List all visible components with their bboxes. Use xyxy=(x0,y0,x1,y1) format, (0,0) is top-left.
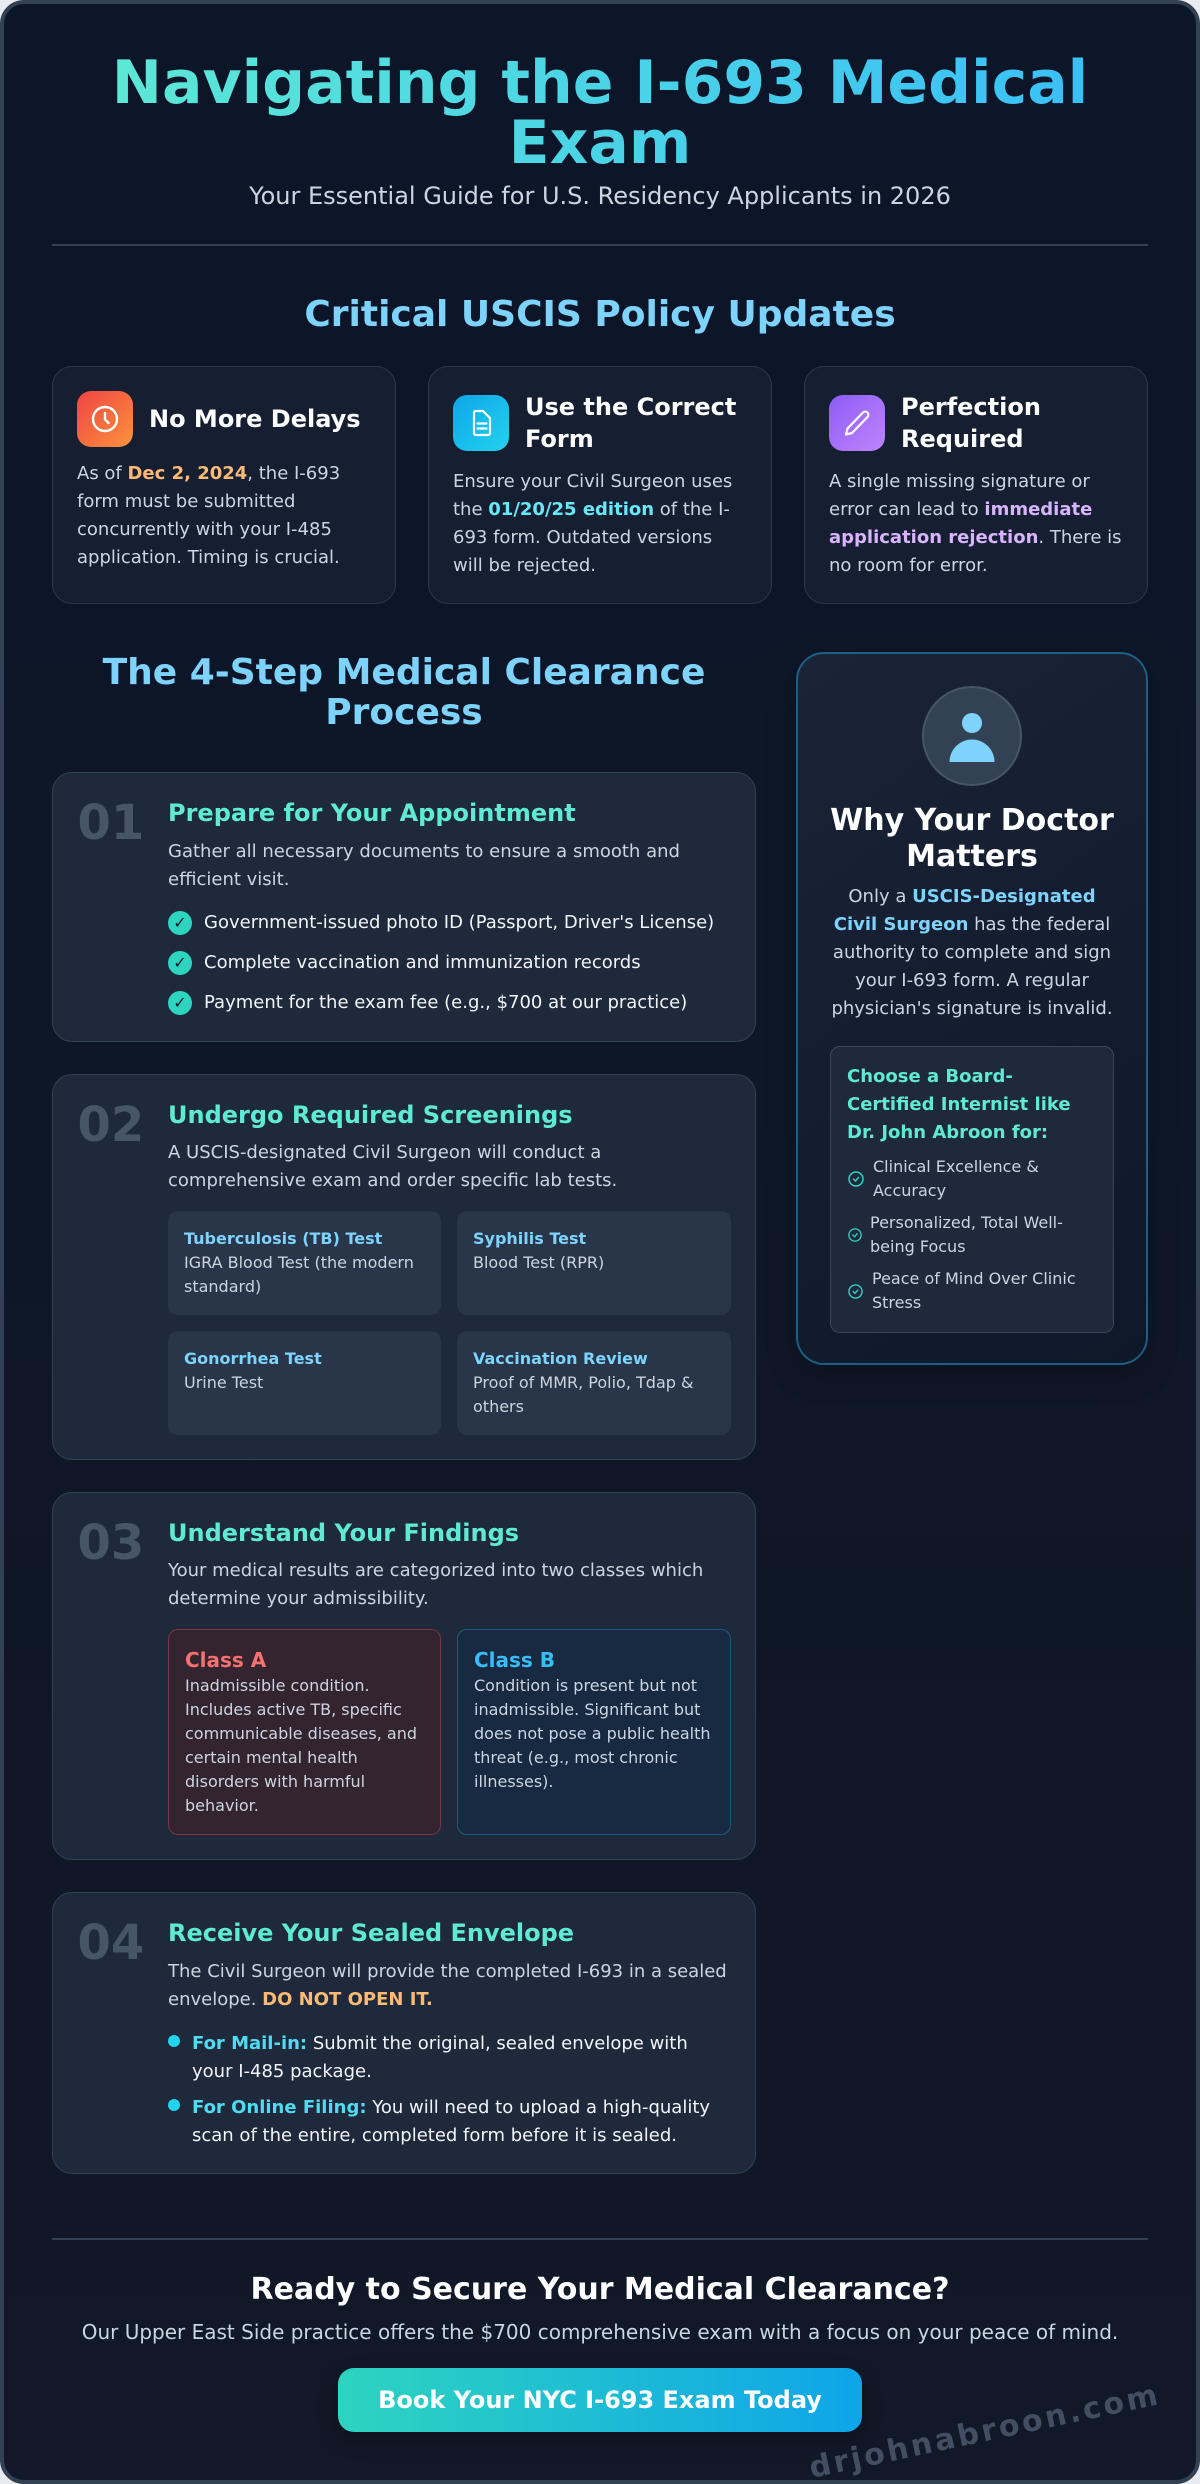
box heading: Choose a Board-Certified Internist like Dr. John Abroon for: xyxy=(847,1066,1071,1143)
step 2 content xyxy=(168,1101,731,1435)
step 3 content xyxy=(168,1519,731,1835)
test: syphilis: Blood Test (RPR) xyxy=(473,1253,604,1272)
test: syphilis: Syphilis Test xyxy=(473,1229,586,1248)
test: vaccination: Proof of MMR, Polio, Tdap & others xyxy=(473,1373,693,1416)
button: book exam: Book Your NYC I-693 Exam Today xyxy=(378,2386,822,2414)
title: Navigating the I-693 Medical Exam xyxy=(112,48,1088,178)
heading: policy updates: Critical USCIS Policy Updates xyxy=(304,294,896,335)
benefit item: Personalized, Total Well-being Focus xyxy=(870,1213,1063,1256)
icon: clock xyxy=(77,391,133,447)
panel: why your doctor matters xyxy=(796,652,1148,1365)
subtitle: Your Essential Guide for U.S. Residency Applicants in 2026 xyxy=(249,182,951,210)
panel: correct form xyxy=(428,366,772,604)
class A xyxy=(168,1629,441,1835)
test: vaccination: Vaccination Review xyxy=(473,1349,648,1368)
board-certified box xyxy=(830,1046,1114,1333)
test: gonorrhea: Gonorrhea Test xyxy=(184,1349,322,1368)
button: book exam xyxy=(338,2368,862,2432)
step 4 content: Receive Your Sealed Envelope xyxy=(168,1919,574,1947)
test: syphilis xyxy=(457,1211,731,1315)
test: gonorrhea xyxy=(168,1331,441,1435)
icon: doctor avatar xyxy=(922,686,1022,786)
panel: no more delays: No More Delays xyxy=(149,405,361,433)
panel: step 3 xyxy=(52,1492,756,1860)
checklist item: ✓ xyxy=(173,913,187,932)
panel: no more delays: As of Dec 2, 2024, the I-693 form must be submitted concurrently with your I-485 application. Timing is crucial. xyxy=(77,463,340,568)
test: tuberculosis: Tuberculosis (TB) Test xyxy=(184,1229,382,1248)
step 1 content xyxy=(168,799,714,1015)
checklist item: Government-issued photo ID (Passport, Driver's License) xyxy=(204,912,714,933)
step 3 content: Understand Your Findings xyxy=(168,1519,519,1547)
panel: perfection required: A single missing signature or error can lead to immediate application rejection. There is no room for error. xyxy=(829,471,1122,576)
call to action text: Our Upper East Side practice offers the $700 comprehensive exam with a focus on your peace of mind. xyxy=(82,2320,1118,2344)
step 1 content: Gather all necessary documents to ensure a smooth and efficient visit. xyxy=(168,841,680,890)
step number 01: 01 xyxy=(78,795,144,851)
panel: perfection required xyxy=(804,366,1148,604)
sidebar title: Why Your Doctor Matters xyxy=(830,803,1114,874)
step 4 content: The Civil Surgeon will provide the completed I-693 in a sealed envelope. DO NOT OPEN IT. xyxy=(168,1961,727,2010)
step number 03: 03 xyxy=(78,1515,144,1571)
panel: step 4 xyxy=(52,1892,756,2174)
test: tuberculosis: IGRA Blood Test (the modern standard) xyxy=(184,1253,414,1296)
screening tests grid xyxy=(168,1211,731,1435)
bullet: mail-in: For Mail-in: Submit the original, sealed envelope with your I-485 package. xyxy=(192,2033,688,2082)
sidebar text: Only a USCIS-Designated Civil Surgeon has the federal authority to complete and sign your I-693 form. A regular physician's signature is invalid. xyxy=(831,886,1113,1019)
panel: perfection required: Perfection Required xyxy=(901,393,1041,453)
checklist item: ✓ xyxy=(173,953,187,972)
class A: Class A xyxy=(185,1648,266,1672)
checklist item: Complete vaccination and immunization records xyxy=(204,952,641,973)
class B: Condition is present but not inadmissible. Significant but does not pose a public health threat (e.g., most chronic illnesses). xyxy=(474,1676,710,1791)
icon: pencil xyxy=(829,395,885,451)
panel: no more delays xyxy=(52,366,396,604)
bullet: online filing: For Online Filing: You will need to upload a high-quality scan of the entire, completed form before it is sealed. xyxy=(192,2097,710,2146)
step 1 content: Prepare for Your Appointment xyxy=(168,799,576,827)
checklist item: ✓ xyxy=(173,993,187,1012)
benefit item: Peace of Mind Over Clinic Stress xyxy=(872,1269,1076,1312)
panel: correct form: Use the Correct Form xyxy=(525,393,736,453)
checklist item: Payment for the exam fee (e.g., $700 at our practice) xyxy=(204,992,687,1013)
class A: Inadmissible condition. Includes active TB, specific communicable diseases, and certain mental health disorders with harmful behavior. xyxy=(185,1676,417,1815)
class B xyxy=(457,1629,731,1835)
benefit item: Clinical Excellence & Accuracy xyxy=(873,1157,1039,1200)
step number 04: 04 xyxy=(78,1915,144,1971)
class comparison xyxy=(168,1629,731,1835)
panel: step 2 xyxy=(52,1074,756,1460)
step 2 content: A USCIS-designated Civil Surgeon will conduct a comprehensive exam and order specific lab tests. xyxy=(168,1142,617,1191)
class B: Class B xyxy=(474,1648,555,1672)
panel: correct form: Ensure your Civil Surgeon uses the 01/20/25 edition of the I-693 form. Outdated versions will be rejected. xyxy=(453,471,732,576)
step number 02: 02 xyxy=(78,1097,144,1153)
test: vaccination xyxy=(457,1331,731,1435)
test: tuberculosis xyxy=(168,1211,441,1315)
call to action heading: Ready to Secure Your Medical Clearance? xyxy=(251,2272,949,2307)
icon: document xyxy=(453,395,509,451)
step 3 content: Your medical results are categorized into two classes which determine your admissibility. xyxy=(168,1560,703,1609)
panel: step 1 xyxy=(52,772,756,1042)
step 4 content xyxy=(168,1919,727,2146)
heading: 4-step process: The 4-Step Medical Clearance Process xyxy=(103,652,705,733)
watermark: drjohnabroon.com xyxy=(806,2377,1164,2484)
step 2 content: Undergo Required Screenings xyxy=(168,1101,573,1129)
test: gonorrhea: Urine Test xyxy=(184,1373,263,1392)
